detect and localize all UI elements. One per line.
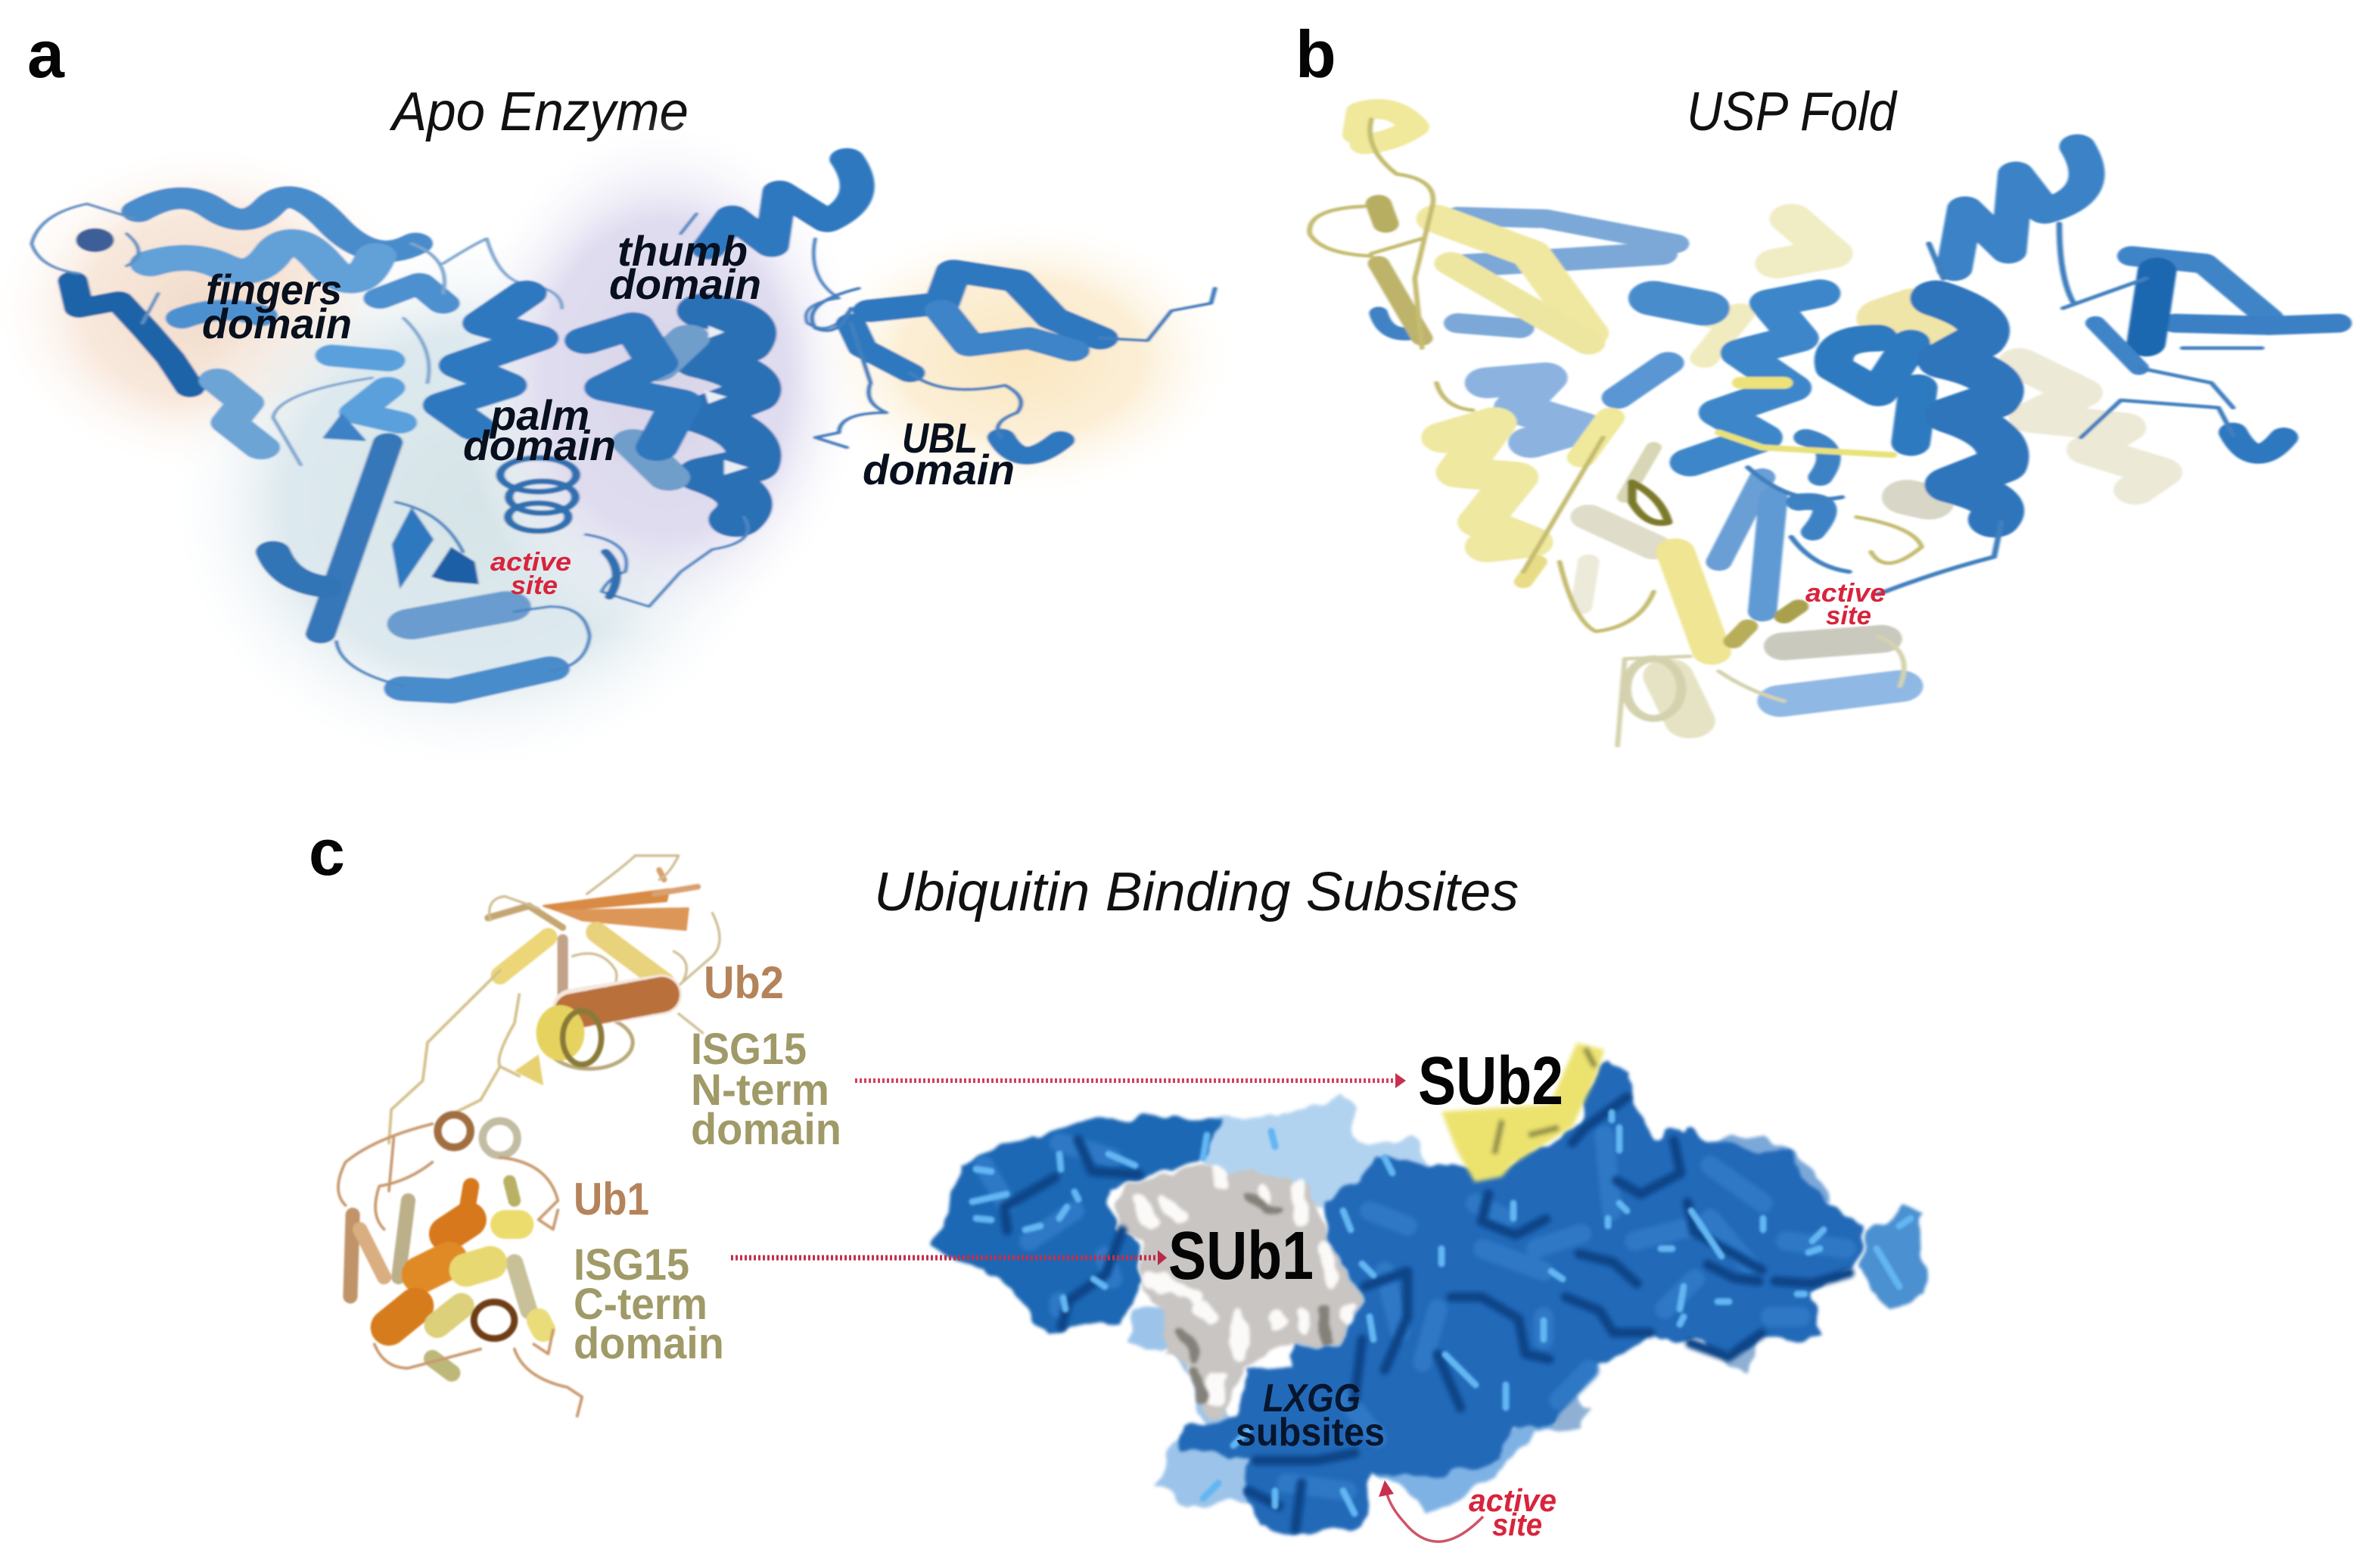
arrow: N-term to SUb2	[855, 1073, 1406, 1088]
label: active site b: site	[1826, 602, 1871, 630]
label: palm domain: palm	[489, 391, 589, 439]
panel c: ubiquitin binding subsites	[309, 817, 1927, 1542]
title: Ubiquitin Binding Subsites: Ubiquitin Binding Subsites	[874, 862, 1519, 922]
structure: apo enzyme ribbon	[0, 114, 1242, 780]
panel b: USP fold	[1295, 17, 2338, 746]
arrow: C-term to SUb1	[731, 1250, 1167, 1265]
domain glow: UBL	[799, 214, 1242, 502]
label: thumb domain: domain	[609, 260, 761, 308]
label: ISG15 N-term domain: ISG15	[691, 1025, 807, 1074]
Ub2 N-terminal domain	[389, 856, 720, 1143]
palm helices and strands	[273, 294, 617, 691]
title: USP Fold: USP Fold	[1687, 82, 1898, 142]
panel letter b: b	[1295, 17, 1336, 92]
surface: SUb2 yellow patch	[1441, 1043, 1604, 1182]
structure: USP fold overlay	[1310, 109, 2338, 746]
surface: main body	[1180, 1062, 1866, 1535]
label: ISG15 C-term domain: C-term	[574, 1280, 708, 1329]
label: ISG15 C-term domain: domain	[574, 1319, 724, 1368]
panel letter a: a	[27, 17, 65, 92]
domain glow: palm	[158, 224, 791, 780]
surface shading	[1004, 1097, 1849, 1529]
protein surface	[933, 1043, 1927, 1535]
thumb helices	[586, 159, 857, 607]
UBL domain	[812, 271, 1215, 456]
label: active site a: site	[511, 571, 558, 600]
domain glow: fingers	[0, 139, 428, 478]
label: active site c	[1469, 1482, 1557, 1542]
light blue strands	[1379, 216, 1900, 701]
label: LXGG subsites: subsites	[1236, 1411, 1385, 1454]
arrow: active site pointer	[1379, 1480, 1483, 1542]
label: active site c: site	[1492, 1507, 1542, 1542]
label: active site b	[1805, 579, 1886, 630]
domain glow: thumb	[459, 114, 871, 642]
label: thumb domain	[609, 227, 761, 308]
label: palm domain	[463, 391, 616, 469]
label: active site b: active	[1805, 579, 1886, 608]
label: palm domain: domain	[463, 422, 616, 469]
label: LXGG subsites	[1236, 1377, 1385, 1454]
Ub1 C-terminal domain	[338, 1115, 582, 1416]
pale translucent surface halo	[1127, 1094, 1927, 1512]
label: thumb domain: thumb	[617, 227, 748, 275]
label: fingers domain	[202, 266, 352, 347]
label: Ub1: Ub1	[574, 1174, 649, 1224]
label: active site a	[490, 548, 571, 600]
label: SUb2: SUb2	[1418, 1044, 1563, 1119]
label: UBL domain	[863, 414, 1015, 493]
label: ISG15 N-term domain: domain	[691, 1105, 841, 1154]
label: ISG15 N-term domain	[691, 1025, 841, 1154]
label: SUb1: SUb1	[1168, 1218, 1314, 1294]
label: active site a: active	[490, 548, 571, 577]
label: Ub2: Ub2	[704, 957, 784, 1008]
panel letter c: c	[309, 817, 345, 889]
label: UBL domain: UBL	[902, 414, 978, 462]
label: fingers domain: fingers	[206, 266, 342, 313]
pale background helices	[1581, 219, 2160, 721]
title: Apo Enzyme: Apo Enzyme	[389, 82, 689, 142]
label: ISG15 C-term domain: ISG15	[574, 1240, 689, 1290]
panel a: apo enzyme	[0, 17, 1242, 780]
palm coil	[500, 458, 576, 531]
label: LXGG subsites: LXGG	[1263, 1377, 1361, 1420]
fingers ribbons	[32, 197, 562, 465]
main blue helices	[1690, 147, 2087, 594]
label: ISG15 C-term domain	[574, 1240, 724, 1368]
label: UBL domain: domain	[863, 446, 1015, 493]
surface: SUb1 grey patch	[1112, 1166, 1362, 1417]
UBL domain b	[2063, 256, 2338, 454]
structure: ISG15 ribbon	[338, 856, 720, 1416]
yellow USP ribbons	[1310, 109, 1922, 746]
label: ISG15 N-term domain: N-term	[691, 1066, 829, 1115]
label: fingers domain: domain	[202, 300, 352, 347]
label: active site c: active	[1469, 1482, 1557, 1518]
surface highlights	[972, 1112, 1911, 1514]
surface: left lobe	[933, 1116, 1220, 1333]
surface lobes	[984, 1135, 1846, 1491]
